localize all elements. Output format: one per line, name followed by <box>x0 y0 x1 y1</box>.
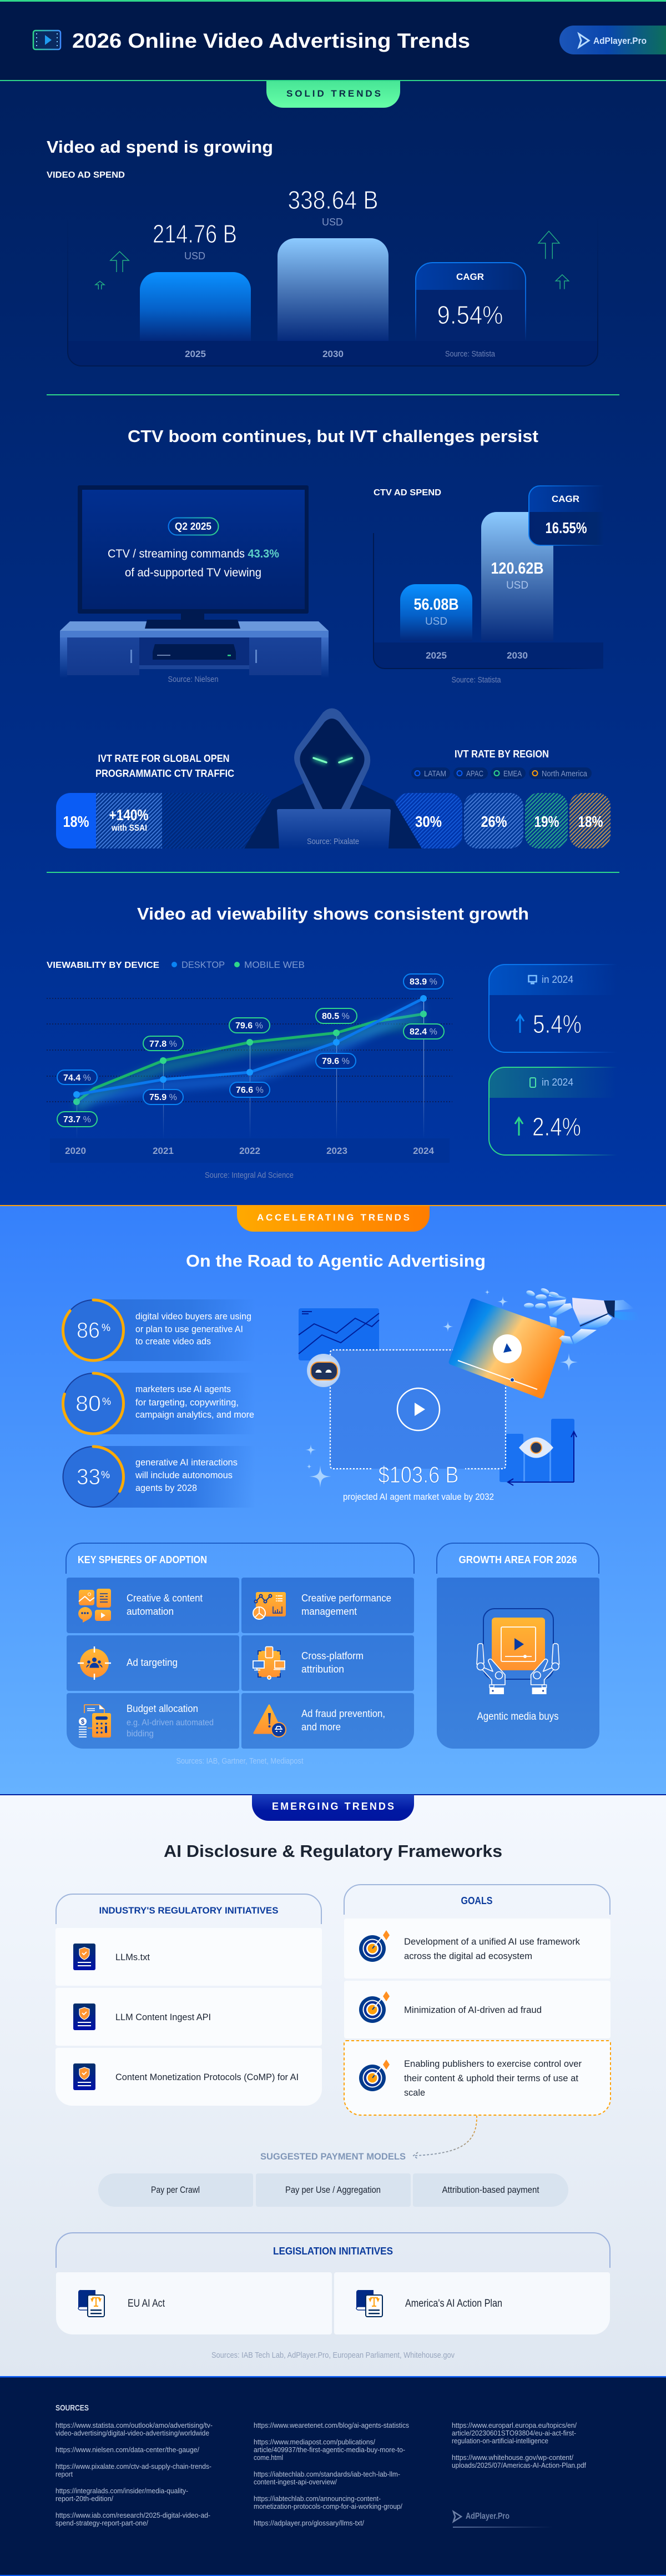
value labels: 73.7 % <box>63 1115 91 1124</box>
value labels: 74.4 % <box>63 1073 91 1083</box>
card: cross-platform attribution: attribution <box>301 1664 344 1675</box>
links column 2: https://www.mediapost.com/publications/ <box>254 2438 375 2446</box>
bar: 2025: 56.08B <box>414 596 458 614</box>
card: creative performance management: Creative performance <box>301 1593 391 1604</box>
value labels: 82.4 % <box>410 1027 437 1037</box>
icon: devices <box>253 1647 285 1679</box>
chart: viewability by device <box>47 960 452 1180</box>
option: attribution: Attribution-based payment <box>442 2185 539 2195</box>
title: 2026 Online Video Advertising Trends <box>72 29 470 52</box>
item: LLM Content Ingest API: LLM Content Ingest API <box>115 2012 211 2022</box>
value labels: 80.5 % <box>322 1012 350 1021</box>
links column 2: come.html <box>254 2453 283 2462</box>
card: cross-platform attribution <box>241 1635 414 1691</box>
market value <box>343 1462 494 1502</box>
axis years: 2020 <box>65 1146 86 1156</box>
source: Source: Statista <box>445 349 496 359</box>
links column 1: report-20th-edition/ <box>56 2494 113 2503</box>
card: budget allocation: bidding <box>127 1729 154 1739</box>
panel: IVT rate global: IVT RATE FOR GLOBAL OPEN <box>98 753 230 764</box>
links column 1: https://integralads.com/insider/media-quality- <box>56 2487 188 2495</box>
bar: 2030 <box>278 185 389 359</box>
panel: growth area for 2026 <box>437 1543 599 1749</box>
market value: projected AI agent market value by 2032 <box>343 1492 494 1502</box>
market value: $103.6 B <box>379 1462 458 1488</box>
links column 2: https://iabtechlab.com/standards/iab-tech-lab-llm- <box>254 2470 400 2478</box>
labels: region IVT values: 26% <box>481 813 507 830</box>
card: creative & content automation: automation <box>127 1606 174 1617</box>
header band <box>0 0 666 81</box>
bar: APAC 26% <box>464 793 523 848</box>
bar: 18% <box>56 793 96 848</box>
background: solid trends section <box>0 81 666 1205</box>
chart: video ad spend bars <box>68 185 598 366</box>
icon: monitor <box>528 976 536 983</box>
cabinet <box>60 621 329 679</box>
goal: minimize fraud <box>344 1981 610 2038</box>
card: mobile growth 2.4%: in 2024 <box>542 1077 573 1088</box>
icon: phone <box>530 1078 536 1087</box>
heading: sources: SOURCES <box>56 2403 89 2413</box>
bar: 2030: 338.64 B <box>287 185 379 214</box>
icon: fraud warning <box>254 1705 286 1737</box>
bar: 2025: 214.76 B <box>153 219 237 248</box>
option: attribution <box>413 2173 568 2207</box>
legend: VIEWABILITY BY DEVICE <box>47 961 159 970</box>
illustration: TV on cabinet <box>60 485 329 684</box>
tv screen: CTV / streaming commands 43.3% <box>108 548 279 560</box>
icon: robot head <box>307 1354 340 1387</box>
stat: 86%: 86 <box>77 1318 100 1343</box>
panel: key spheres of adoption <box>66 1543 414 1766</box>
value labels: 75.9 % <box>149 1093 177 1102</box>
robot hand <box>524 1287 640 1344</box>
value labels <box>57 974 444 1127</box>
bar: 2025: USD <box>425 616 447 627</box>
legend: LATAM <box>424 769 446 779</box>
bar: 2030: 2030 <box>322 349 344 359</box>
icon: budget calculator <box>79 1705 111 1738</box>
links column 1: https://www.statista.com/outlook/amo/advertising/tv- <box>56 2421 213 2429</box>
panel heading: LEGISLATION INITIATIVES <box>273 2246 393 2257</box>
panel: IVT rate by region <box>395 749 610 848</box>
tv screen: of ad-supported TV viewing <box>125 566 261 579</box>
card: creative performance management <box>241 1578 414 1633</box>
item: LLMs.txt <box>56 1928 322 1986</box>
legend: EMEA <box>503 769 522 779</box>
labels: region IVT values <box>415 813 603 830</box>
goal: publisher control: Enabling publishers to exercise control over <box>404 2058 582 2069</box>
bar: North America 18% <box>569 793 610 848</box>
links column 1: https://www.pixalate.com/ctv-ad-supply-chain-trends- <box>56 2462 211 2470</box>
heading: video ad spend: Video ad spend is growing <box>47 137 273 157</box>
option: pay per crawl: Pay per Crawl <box>151 2185 200 2195</box>
bar: +140% with SSAI: +140% <box>109 806 149 823</box>
bar: 2025: USD <box>184 250 205 262</box>
card: budget allocation <box>67 1693 239 1749</box>
section tab: accelerating trends <box>237 1206 430 1232</box>
icon: target audience <box>78 1646 111 1680</box>
arrow: goal to payment models <box>413 2116 477 2159</box>
source: Sources: IAB Tech Lab, AdPlayer.Pro, European Parliament, Whitehouse.gov <box>211 2351 455 2360</box>
callout: CAGR 9.54% <box>416 263 526 341</box>
card: ad fraud prevention: Ad fraud prevention, <box>301 1708 385 1719</box>
stat: 33% <box>63 1446 255 1508</box>
item: LLM Content Ingest API <box>56 1988 322 2046</box>
links column 2: monetization-protocols-comp-for-ai-working-group/ <box>254 2502 402 2510</box>
panel heading <box>66 1543 414 1574</box>
panel heading <box>56 1894 321 1924</box>
legend: DESKTOP <box>181 960 225 970</box>
bar: dark remainder <box>162 793 272 848</box>
section tab: accelerating trends: ACCELERATING TRENDS <box>257 1212 410 1223</box>
axis years: 2024 <box>413 1146 434 1156</box>
links column 2: https://iabtechlab.com/announcing-content- <box>254 2494 381 2503</box>
tv screen: Q2 2025 <box>175 521 211 532</box>
panel: goals <box>344 1885 610 2115</box>
stat: 33%: will include autonomous <box>135 1470 233 1480</box>
links column 1 <box>56 2421 213 2527</box>
illustration: hooded hacker <box>244 709 422 848</box>
tv screen <box>78 485 309 629</box>
heading: agentic advertising: On the Road to Agentic Advertising <box>186 1251 486 1271</box>
icon: up arrow <box>516 1015 524 1033</box>
heading: CTV boom: CTV boom continues, but IVT challenges persist <box>128 426 538 446</box>
stat: 80%: marketers use AI agents <box>135 1384 231 1394</box>
card: creative & content automation: Creative & content <box>127 1593 203 1604</box>
card: ad fraud prevention <box>241 1693 414 1749</box>
legend <box>411 767 592 779</box>
callout: CAGR 9.54%: CAGR <box>456 272 484 282</box>
bar: 2025 <box>140 219 251 359</box>
panel: IVT rate global: PROGRAMMATIC CTV TRAFFIC <box>95 768 234 779</box>
card: desktop growth 5.4%: in 2024 <box>542 974 573 985</box>
panel: IVT rate global <box>56 753 272 848</box>
logo: AdPlayer.Pro <box>559 26 666 54</box>
legend <box>47 960 305 970</box>
bar: EMEA 19% <box>525 793 568 848</box>
legend: APAC <box>466 769 483 779</box>
background: accelerating trends section <box>0 1205 666 1795</box>
links column 3: regulation-on-artificial-intelligence <box>452 2437 548 2445</box>
value labels: 83.9 % <box>410 977 437 987</box>
value labels: 77.8 % <box>149 1040 177 1049</box>
icon: hands holding video <box>477 1609 559 1694</box>
callout: CAGR 16.55%: CAGR <box>552 494 579 504</box>
panel heading <box>344 1885 610 1915</box>
icon: budget calculator: $ <box>81 1719 84 1725</box>
goal: unified framework: Development of a unified AI use framework <box>404 1936 580 1947</box>
panel: industry's regulatory initiatives <box>56 1894 322 2106</box>
links column 3: article/20230601STO93804/eu-ai-act-first- <box>452 2429 576 2437</box>
logo: AdPlayer.Pro footer: AdPlayer.Pro <box>466 2512 509 2521</box>
card: creative performance management: management <box>301 1606 357 1617</box>
footer: sources <box>0 2376 666 2576</box>
card: budget allocation: e.g. AI-driven automated <box>127 1718 214 1728</box>
card: ad targeting: Ad targeting <box>127 1657 178 1668</box>
links column 3: https://www.whitehouse.gov/wp-content/ <box>452 2453 573 2462</box>
links column 1: https://www.nielsen.com/data-center/the-gauge/ <box>56 2446 199 2454</box>
source: Source: Pixalate <box>307 837 359 846</box>
bar: 2025: 2025 <box>185 349 206 359</box>
panel: payment models <box>98 2173 568 2207</box>
label: video ad spend: VIDEO AD SPEND <box>47 170 125 180</box>
value labels: 79.6 % <box>235 1021 263 1031</box>
source: Source: Nielsen <box>168 675 219 684</box>
links column 2: article/409937/the-first-agentic-media-buy-more-to- <box>254 2446 405 2454</box>
card: budget allocation: Budget allocation <box>127 1703 198 1714</box>
legend: MOBILE WEB <box>244 960 305 970</box>
stat: 80%: campaign analytics, and more <box>135 1409 254 1420</box>
option: pay per use <box>256 2173 411 2207</box>
bar: +140% with SSAI <box>96 793 162 848</box>
goal: publisher control <box>344 2041 610 2115</box>
links column 3: https://www.europarl.europa.eu/topics/en/ <box>452 2421 577 2429</box>
chart card <box>299 1308 379 1360</box>
bar: 2025 <box>400 584 472 661</box>
stat: 33%: % <box>101 1469 110 1480</box>
goal: unified framework <box>344 1919 610 1979</box>
icon: analytics <box>253 1592 286 1619</box>
section tab: emerging trends <box>252 1795 414 1821</box>
sparkles <box>305 1289 578 1488</box>
links column 2: https://www.wearetenet.com/blog/ai-agents-statistics <box>254 2421 409 2429</box>
option: pay per crawl <box>98 2173 253 2207</box>
stat: 86%: digital video buyers are using <box>135 1311 251 1322</box>
logo: AdPlayer.Pro: AdPlayer.Pro <box>593 36 647 46</box>
chart: CTV ad spend: CTV AD SPEND <box>374 488 441 498</box>
panel heading: GROWTH AREA FOR 2026 <box>458 1554 577 1565</box>
item: LLMs.txt: LLMs.txt <box>115 1952 150 1962</box>
axis years: 2022 <box>239 1146 260 1156</box>
area and line: mobile web <box>73 1011 427 1108</box>
video box <box>330 1350 506 1469</box>
legend: North America <box>542 769 588 779</box>
labels: region IVT values: 18% <box>578 813 603 830</box>
illustration: AI agent market <box>299 1287 640 1502</box>
bar: 2030: USD <box>322 217 343 228</box>
goal: publisher control: their content & uphold their terms of use at <box>404 2073 578 2083</box>
heading: AI disclosure: AI Disclosure & Regulatory Frameworks <box>164 1841 502 1861</box>
card: desktop growth 5.4% <box>488 964 617 1052</box>
logo: AdPlayer.Pro footer <box>453 2512 553 2528</box>
stat: 33%: 33 <box>77 1465 100 1489</box>
value labels: 76.6 % <box>236 1086 264 1095</box>
stat: 86%: % <box>102 1322 110 1333</box>
background: emerging trends section <box>0 1794 666 2377</box>
labels: region IVT values: 19% <box>534 813 559 830</box>
bar: +140% with SSAI: with SSAI <box>111 823 147 833</box>
axis years: 2021 <box>153 1146 174 1156</box>
source: Source: Statista <box>452 675 501 685</box>
chart: CTV ad spend <box>374 486 604 685</box>
stat: 33%: generative AI interactions <box>135 1457 238 1468</box>
section tab: emerging trends: EMERGING TRENDS <box>272 1801 394 1812</box>
section tab: solid trends <box>266 81 400 108</box>
panel: legislation initiatives <box>56 2233 610 2360</box>
links column 3 <box>452 2421 586 2469</box>
callout: CAGR 16.55%: 16.55% <box>545 519 587 536</box>
heading: viewability: Video ad viewability shows consistent growth <box>137 904 529 923</box>
source: Sources: IAB, Gartner, Tenet, Mediapost <box>176 1756 304 1766</box>
section tab: solid trends: SOLID TRENDS <box>286 88 381 99</box>
callout: CAGR 16.55% <box>529 486 604 545</box>
option: pay per use: Pay per Use / Aggregation <box>285 2185 381 2195</box>
links column 3: uploads/2025/07/Americas-AI-Action-Plan.pdf <box>452 2461 586 2469</box>
links column 2 <box>254 2421 409 2527</box>
item: EU AI Act: EU AI Act <box>128 2298 165 2309</box>
links column 1: https://www.iab.com/research/2025-digital-video-ad- <box>56 2511 210 2519</box>
panel heading: INDUSTRY'S REGULATORY INITIATIVES <box>99 1905 279 1916</box>
card: ad targeting <box>67 1635 239 1691</box>
stat: 80%: for targeting, copywriting, <box>135 1397 239 1408</box>
links column 2: content-ingest-api-overview/ <box>254 2478 337 2486</box>
card: creative & content automation <box>67 1578 239 1633</box>
icon: video film <box>33 31 60 49</box>
item: CoMP: Content Monetization Protocols (CoMP) for AI <box>115 2072 299 2082</box>
value labels: 79.6 % <box>322 1057 350 1066</box>
tablet <box>451 1301 562 1396</box>
label: suggested payment models: SUGGESTED PAYMENT MODELS <box>260 2151 406 2162</box>
axis years: 2023 <box>326 1146 347 1156</box>
links column 1: video-advertising/digital-video-advertising/worldwide <box>56 2429 209 2437</box>
item: America's AI Action Plan: America's AI Action Plan <box>405 2298 502 2309</box>
panel: IVT rate by region: IVT RATE BY REGION <box>455 749 549 760</box>
area and line: desktop <box>73 995 427 1101</box>
icon: growth arrows <box>95 231 569 289</box>
card: ad fraud prevention: and more <box>301 1721 341 1733</box>
icon: eye <box>519 1437 553 1458</box>
bar: 2030: USD <box>506 580 528 591</box>
goal: unified framework: across the digital ad ecosystem <box>404 1951 532 1961</box>
item: CoMP <box>56 2048 322 2106</box>
panel heading: KEY SPHERES OF ADOPTION <box>78 1554 207 1565</box>
stat: 80%: 80 <box>75 1392 101 1416</box>
goal: publisher control: scale <box>404 2087 425 2098</box>
stat: 33%: agents by 2028 <box>135 1483 197 1493</box>
stat: 86%: to create video ads <box>135 1336 211 1347</box>
panel heading <box>437 1543 599 1574</box>
card: mobile growth 2.4% <box>488 1067 617 1155</box>
item: EU AI Act <box>56 2272 332 2334</box>
card: mobile growth 2.4%: 2.4% <box>532 1112 581 1141</box>
callout: CAGR 9.54%: 9.54% <box>437 300 503 329</box>
card: cross-platform attribution: Cross-platform <box>301 1650 364 1661</box>
links column 1: spend-strategy-report-part-one/ <box>56 2519 148 2527</box>
source: Source: Integral Ad Science <box>205 1171 294 1180</box>
card: desktop growth 5.4%: 5.4% <box>533 1010 582 1038</box>
stat: 80% <box>63 1373 255 1434</box>
links column 2: https://adplayer.pro/glossary/llms-txt/ <box>254 2519 364 2527</box>
icon: up arrow <box>515 1118 523 1136</box>
labels: region IVT values: 30% <box>415 813 442 830</box>
icon: creative assets <box>78 1589 111 1623</box>
bar: 2030: 2030 <box>507 650 528 661</box>
goal: minimize fraud: Minimization of AI-driven ad fraud <box>404 2005 542 2015</box>
stat: 86% <box>63 1299 255 1361</box>
axis years <box>65 1146 434 1156</box>
bar: 2030: 120.62B <box>491 560 544 578</box>
bar: 18%: 18% <box>63 813 89 830</box>
panel: growth area for 2026: Agentic media buys <box>477 1711 558 1723</box>
bar: 2030 <box>481 512 553 661</box>
panel heading <box>56 2233 610 2268</box>
stat: 86%: or plan to use generative AI <box>135 1324 243 1334</box>
links column 1: report <box>56 2470 73 2478</box>
stat: 80%: % <box>102 1396 111 1407</box>
panel heading: GOALS <box>461 1895 493 1906</box>
bar: 2025: 2025 <box>426 650 447 661</box>
item: America's AI Action Plan <box>334 2272 610 2334</box>
bar chart with arrows <box>500 1419 577 1485</box>
bar: LATAM 30% <box>395 793 462 848</box>
